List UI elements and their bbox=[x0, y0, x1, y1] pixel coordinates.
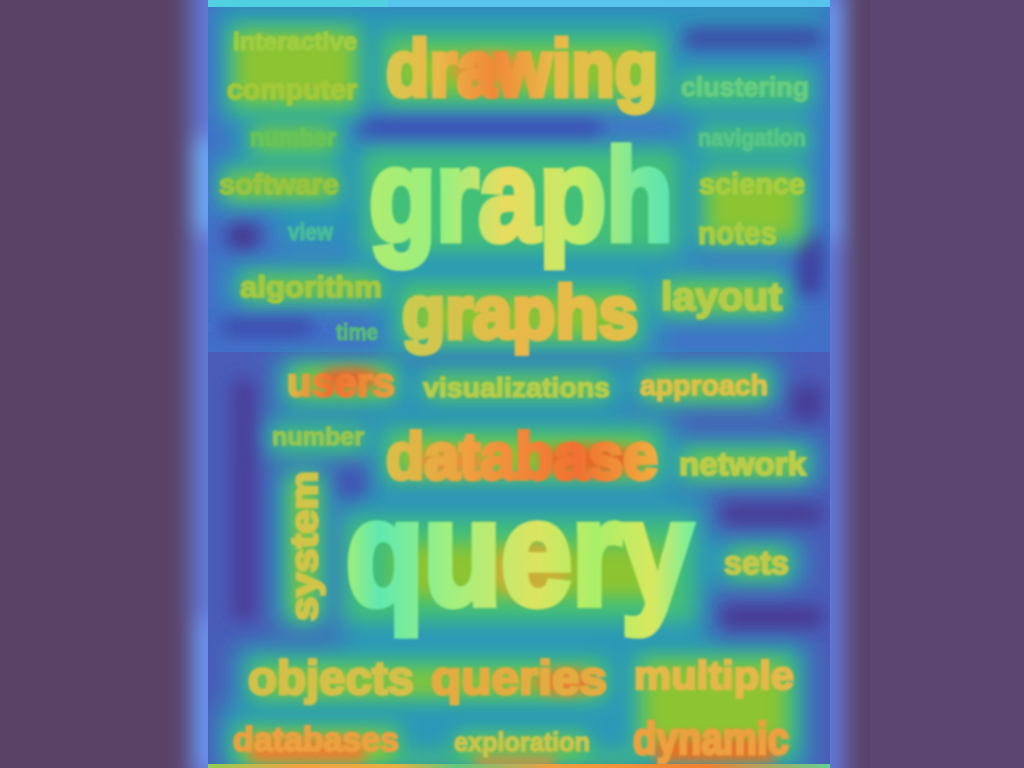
top and bottom strips bbox=[208, 0, 830, 768]
yellow-green heat layer bbox=[230, 34, 798, 760]
word: algorithm: algorithm bbox=[240, 271, 382, 304]
panel: heat background bbox=[208, 0, 830, 768]
word: graph: graph bbox=[369, 122, 673, 268]
word: sets: sets bbox=[724, 544, 789, 581]
word: time: time bbox=[336, 319, 378, 345]
word cloud bbox=[219, 24, 809, 764]
word: multiple: multiple bbox=[634, 654, 794, 698]
word: users: users bbox=[287, 361, 395, 405]
word: graphs: graphs bbox=[402, 271, 638, 354]
word: number: number bbox=[250, 124, 336, 152]
teal heat layer bbox=[214, 0, 825, 768]
word: drawing: drawing bbox=[386, 24, 658, 113]
word: layout: layout bbox=[661, 275, 782, 319]
word: interactive: interactive bbox=[233, 28, 357, 56]
word: objects: objects bbox=[248, 651, 414, 704]
word: clustering: clustering bbox=[681, 72, 809, 102]
orange hot spots bbox=[250, 54, 775, 767]
word: software: software bbox=[219, 169, 339, 201]
word: navigation: navigation bbox=[698, 125, 806, 152]
word: system: system bbox=[284, 471, 326, 621]
word: approach: approach bbox=[640, 370, 768, 402]
green heat layer bbox=[222, 24, 810, 768]
word: science: science bbox=[699, 168, 805, 201]
word: queries: queries bbox=[431, 651, 607, 704]
word: database: database bbox=[386, 419, 658, 493]
word: notes: notes bbox=[698, 215, 777, 251]
word: network: network bbox=[679, 446, 806, 482]
word: exploration: exploration bbox=[454, 727, 590, 757]
word: databases: databases bbox=[233, 721, 399, 759]
side glow bbox=[190, 0, 846, 768]
word: number: number bbox=[272, 423, 364, 451]
word: visualizations: visualizations bbox=[423, 372, 610, 403]
dark cold spots bbox=[222, 30, 822, 626]
word: query: query bbox=[346, 471, 692, 636]
word: dynamic: dynamic bbox=[633, 713, 789, 764]
word: view: view bbox=[288, 219, 333, 246]
word: computer: computer bbox=[227, 74, 357, 106]
